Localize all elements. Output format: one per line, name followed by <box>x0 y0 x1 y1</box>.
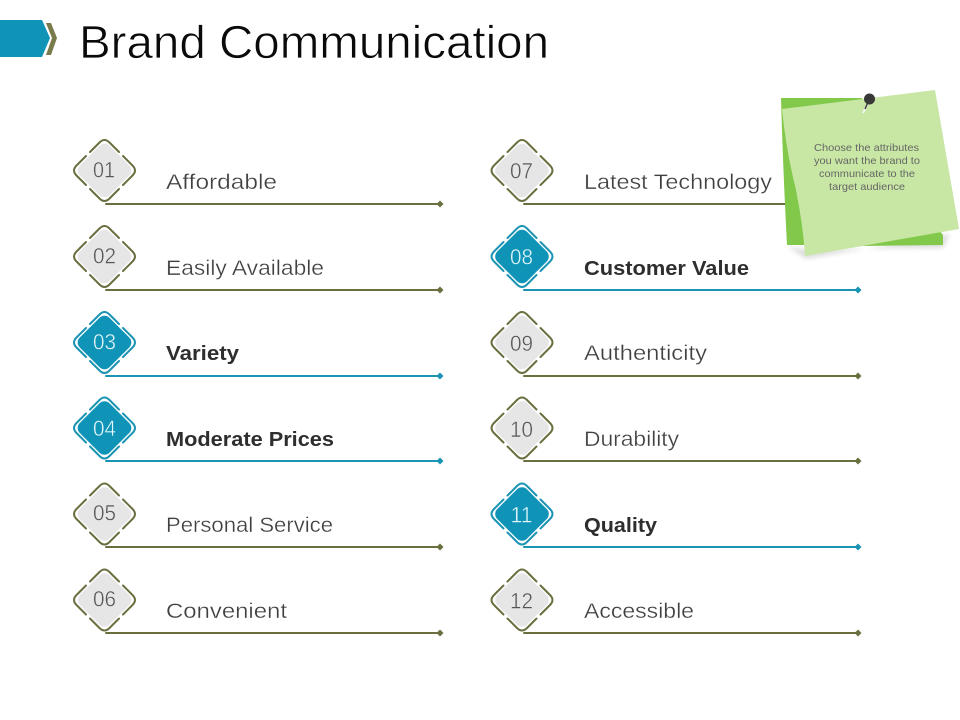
item 03 Variety (highlighted) <box>74 312 444 380</box>
item 01 Affordable: 01 <box>93 158 115 182</box>
title: Brand Communication <box>79 16 549 68</box>
front note <box>782 90 959 256</box>
back note <box>781 98 943 246</box>
item 08 Customer Value (highlighted) <box>492 226 862 294</box>
item 10 Durability: Durability <box>584 428 680 451</box>
sticky note callout <box>781 90 959 259</box>
item 01 Affordable <box>74 140 444 208</box>
item 07 Latest Technology <box>492 140 858 204</box>
item 04 Moderate Prices (highlighted): Moderate Prices <box>166 429 334 451</box>
item 01 Affordable: Affordable <box>166 171 277 194</box>
icon: push pin <box>863 94 875 113</box>
item 06 Convenient: 06 <box>93 586 116 612</box>
item 04 Moderate Prices (highlighted) <box>74 398 444 464</box>
item 10 Durability: 10 <box>510 417 533 442</box>
note text: you want the brand to <box>814 155 920 167</box>
item 09 Authenticity: Authenticity <box>584 342 708 365</box>
item 07 Latest Technology: Latest Technology <box>584 171 773 194</box>
item 11 Quality (highlighted): 11 <box>510 502 532 528</box>
item 08 Customer Value (highlighted): Customer Value <box>584 258 749 280</box>
note text: Choose the attributes <box>814 142 919 154</box>
item 02 Easily Available: Easily Available <box>166 257 324 280</box>
item 08 Customer Value (highlighted): 08 <box>510 244 533 270</box>
item 12 Accessible: 12 <box>510 588 533 614</box>
item 04 Moderate Prices (highlighted): 04 <box>93 416 116 441</box>
item 05 Personal Service: Personal Service <box>166 514 333 537</box>
item 03 Variety (highlighted): Variety <box>166 343 240 365</box>
item 06 Convenient <box>74 570 444 636</box>
item 07 Latest Technology: 07 <box>510 158 533 184</box>
item 09 Authenticity: 09 <box>510 331 533 356</box>
item 11 Quality (highlighted) <box>492 484 862 550</box>
item 11 Quality (highlighted): Quality <box>584 515 658 537</box>
item 02 Easily Available <box>74 226 444 294</box>
item 09 Authenticity <box>492 312 862 380</box>
item 10 Durability <box>492 398 862 464</box>
item 05 Personal Service: 05 <box>93 500 116 526</box>
item 03 Variety (highlighted): 03 <box>93 330 116 354</box>
item 05 Personal Service <box>74 484 444 550</box>
item 12 Accessible: Accessible <box>584 600 694 623</box>
note text: communicate to the <box>819 168 915 180</box>
note text <box>814 142 920 193</box>
item 06 Convenient: Convenient <box>166 600 287 623</box>
item 02 Easily Available: 02 <box>93 244 116 268</box>
header arrow icon <box>0 20 57 57</box>
item 12 Accessible <box>492 570 862 636</box>
note text: target audience <box>829 181 905 193</box>
